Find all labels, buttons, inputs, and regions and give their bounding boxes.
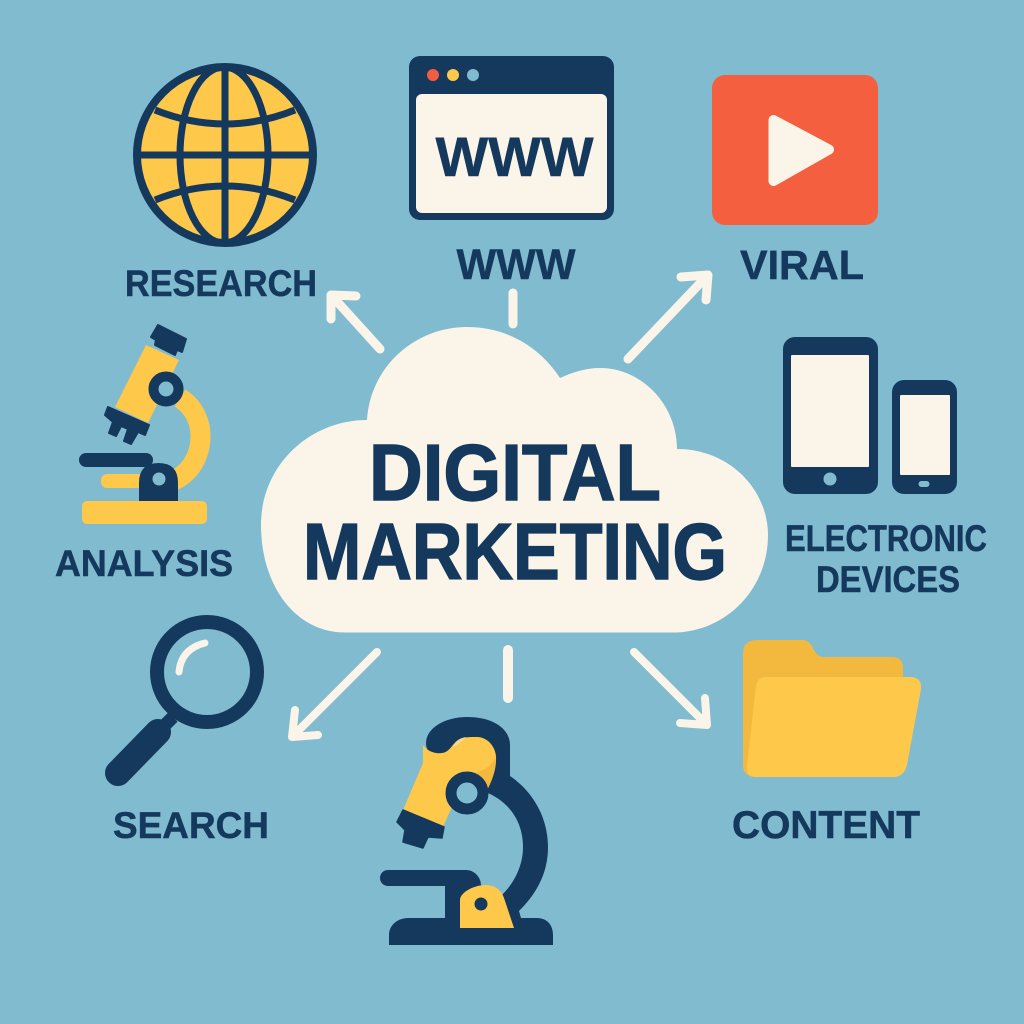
icon: video play xyxy=(712,75,878,225)
arrow: to microscope xyxy=(503,650,513,698)
arrow: to content xyxy=(634,652,707,725)
arrow: to www xyxy=(508,293,518,324)
icon: large microscope xyxy=(380,717,553,945)
title: DIGITAL xyxy=(369,428,661,517)
icon: folder xyxy=(743,640,921,777)
icon: magnifying glass xyxy=(118,622,257,773)
label: www: WWW xyxy=(456,241,576,289)
icon: browser window xyxy=(409,56,614,220)
arrow: to search xyxy=(292,652,377,737)
central cloud with title xyxy=(261,327,768,632)
title: MARKETING xyxy=(303,507,727,596)
arrow: to viral xyxy=(628,275,708,359)
label: analysis: ANALYSIS xyxy=(55,543,233,584)
label: research: RESEARCH xyxy=(125,263,317,304)
icon: tablet and phone xyxy=(783,337,957,494)
browser text: WWW xyxy=(436,125,594,188)
label: search: SEARCH xyxy=(113,805,269,846)
arrow: to research xyxy=(331,295,380,349)
icon: small microscope xyxy=(79,325,207,524)
label: electronic devices xyxy=(785,518,987,600)
label: electronic devices: DEVICES xyxy=(816,559,960,600)
label: electronic devices: ELECTRONIC xyxy=(785,518,987,559)
title xyxy=(303,428,727,596)
label: viral: VIRAL xyxy=(740,242,864,288)
label: content: CONTENT xyxy=(732,804,920,847)
icon: globe xyxy=(137,67,313,243)
